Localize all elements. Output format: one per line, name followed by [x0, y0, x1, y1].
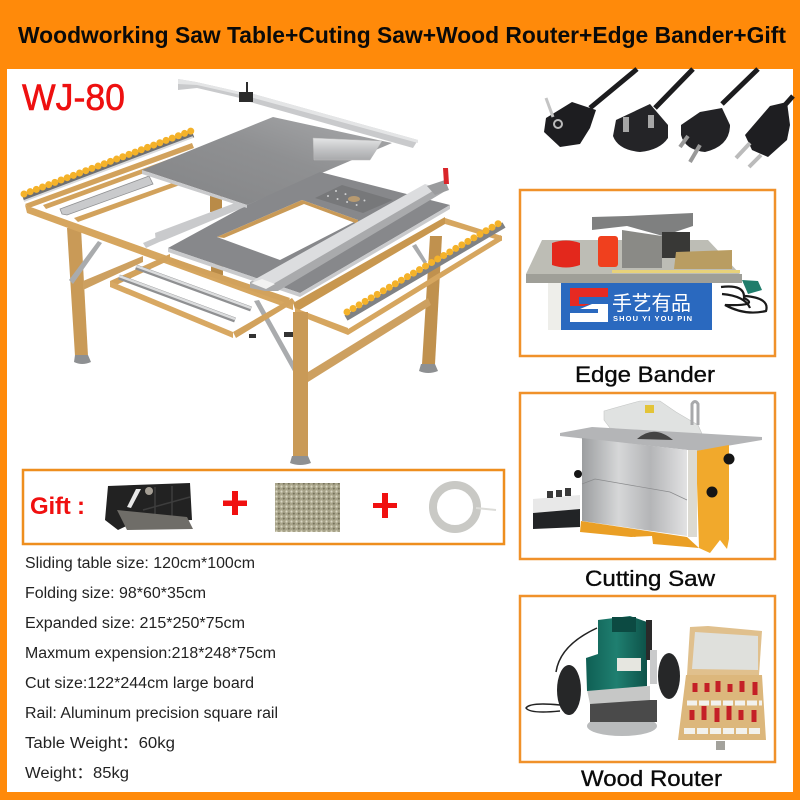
US plug: [736, 102, 790, 167]
table front edge: [526, 274, 742, 283]
center front leg: [293, 312, 308, 456]
router column: [646, 620, 652, 660]
knobs: [574, 454, 734, 498]
specification list: Weight：85kg: [25, 765, 129, 782]
aluminum stop block: [313, 138, 382, 160]
riving knife: [692, 402, 698, 425]
plus sign: [223, 491, 247, 515]
lower stretchers: [83, 256, 431, 382]
gift panel: [23, 470, 504, 544]
model label: WJ-80: [22, 77, 125, 118]
inner window frame: [217, 200, 358, 238]
folding braces: [69, 241, 427, 373]
specification list: Table Weight：60kg: [25, 735, 175, 752]
title: Woodworking Saw Table+Cuting Saw+Wood Router+Edge Bander+Gift: [18, 22, 786, 48]
icon: edge trimmer: [105, 483, 193, 530]
AU plug: [680, 108, 730, 162]
left extension frame: [25, 143, 194, 222]
yellow side panel: [696, 445, 729, 553]
right roller rail: [346, 222, 504, 318]
wiring channel: [688, 450, 697, 537]
silver body: [582, 438, 687, 536]
red bits top row: [695, 681, 755, 695]
lower rods: [119, 267, 251, 320]
specification list: Cut size:122*244cm large board: [25, 675, 254, 692]
table top front edge: [142, 170, 450, 297]
logo: [570, 288, 608, 306]
box clasp: [716, 741, 725, 750]
icon: edge banding tape: [433, 485, 496, 529]
router collar: [587, 686, 650, 704]
back leg: [210, 196, 223, 275]
brand name: 手艺有品: [612, 292, 691, 315]
edge bander panel: [520, 190, 775, 356]
router vent: [612, 617, 636, 632]
EU plug: [544, 98, 596, 147]
label strip upper: [687, 700, 762, 706]
leg feet: [74, 355, 438, 465]
router body: [586, 616, 647, 691]
UK plug: [613, 104, 668, 152]
leveling bolts: [249, 332, 293, 338]
right extension frame: [295, 218, 502, 335]
trimming head: [592, 213, 740, 273]
power plugs: [544, 69, 793, 167]
red roller right: [598, 236, 618, 267]
cutting saw panel: [520, 393, 775, 559]
router legs: [590, 700, 657, 722]
brand plate: [561, 283, 712, 330]
router base: [587, 716, 657, 736]
power cord: [526, 628, 597, 712]
red clamp handle: [443, 168, 449, 184]
back table top: [142, 117, 392, 205]
saw table top: [560, 427, 762, 451]
wood router panel: [520, 596, 775, 762]
cords: [590, 69, 793, 108]
sliding table saw illustration: [23, 79, 504, 465]
edge bander label: Edge Bander: [575, 362, 715, 387]
specification list: Sliding table size: 120cm*100cm: [25, 555, 255, 572]
icon: pellets bag: [275, 483, 340, 532]
warning sticker: [645, 405, 654, 413]
top rip fence: [178, 79, 418, 148]
specification list: Rail: Aluminum precision square rail: [25, 705, 278, 722]
left side fence: [143, 203, 247, 248]
saw blade: [637, 432, 673, 440]
yellow bottom: [580, 521, 699, 548]
wood router label: Wood Router: [581, 766, 722, 791]
left roller rail: [23, 131, 193, 201]
router handles: [557, 653, 680, 715]
specification list: Maxmum expension:218*248*75cm: [25, 645, 276, 662]
main frame rails: [25, 205, 293, 310]
body seam: [582, 479, 687, 500]
right leg: [422, 236, 442, 364]
machine base: [548, 283, 711, 330]
red roller left: [552, 240, 580, 268]
labels row: [684, 728, 762, 734]
power cable: [721, 286, 767, 313]
specification list: Folding size: 98*60*35cm: [25, 585, 206, 602]
left aluminum rail: [60, 176, 153, 215]
router label: [617, 658, 641, 671]
control box: [533, 488, 580, 529]
brand subtitle: SHOU YI YOU PIN: [613, 314, 692, 323]
main crosscut fence: [250, 180, 449, 291]
specification list: [25, 555, 278, 782]
plus sign: [373, 493, 397, 518]
gift label: Gift :: [30, 493, 85, 520]
specification list: Expanded size: 215*250*75cm: [25, 615, 245, 632]
blade guard: [604, 401, 703, 443]
left leg: [67, 228, 88, 356]
router mounting plate: [315, 185, 393, 213]
sub frame: [110, 254, 295, 338]
cutting saw label: Cutting Saw: [585, 566, 715, 591]
machine table: [526, 240, 742, 283]
router bit box: [678, 626, 766, 750]
front table top: [168, 172, 450, 293]
red bits bottom row: [692, 706, 754, 722]
